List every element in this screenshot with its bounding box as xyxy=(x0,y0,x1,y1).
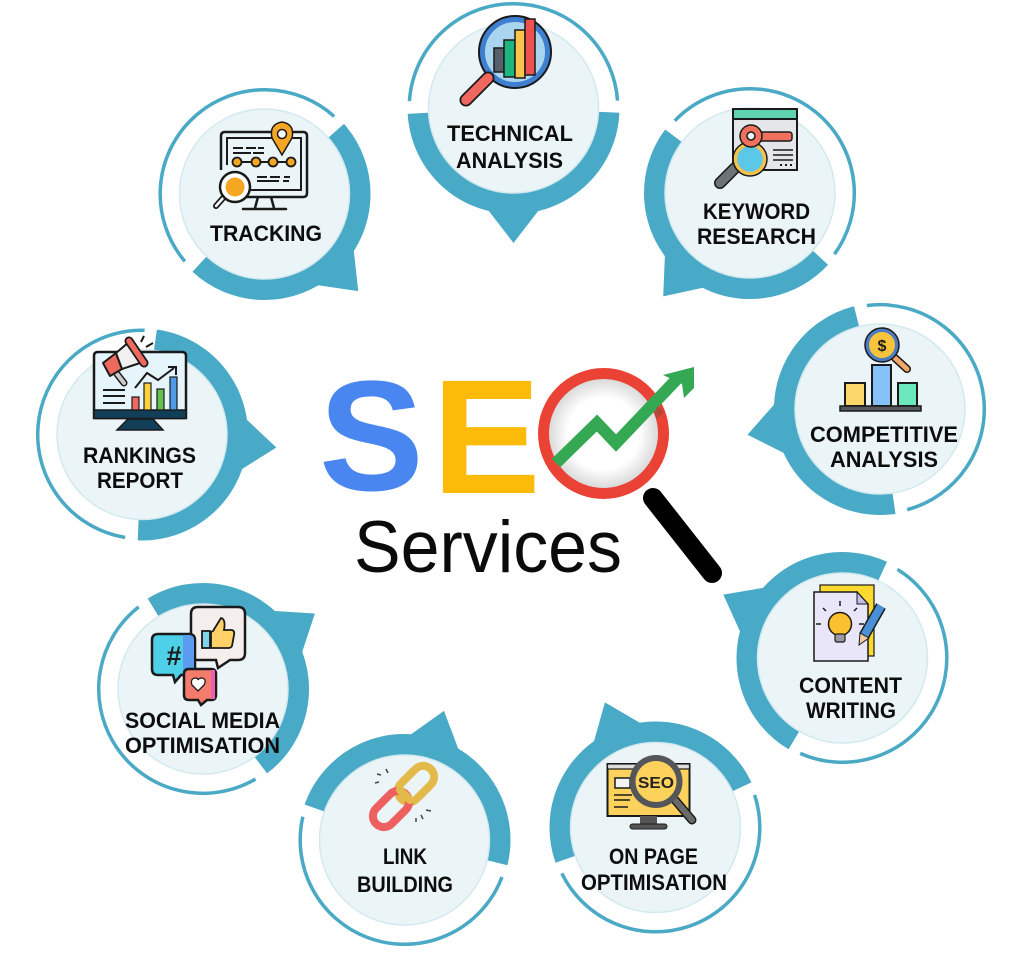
icon: monitor with SEO magnifier: SEO xyxy=(638,775,674,792)
label: rankings report: RANKINGS xyxy=(83,443,196,468)
label: social media optimisation: OPTIMISATION xyxy=(125,733,280,758)
label: content writing: WRITING xyxy=(806,698,896,723)
icon: monitor with location pin xyxy=(216,122,307,209)
label: on page optimisation: ON PAGE xyxy=(609,844,698,869)
panel: competitive analysis xyxy=(726,278,1011,544)
icon: social speech bubbles xyxy=(152,607,245,705)
icon: chain links xyxy=(368,761,439,832)
panel: keyword research xyxy=(578,36,907,368)
panel: social media optimisation xyxy=(48,521,377,844)
letter S: S xyxy=(319,349,424,524)
icon: monitor with SEO magnifier xyxy=(608,758,692,829)
letter E: E xyxy=(432,345,541,528)
badge ring: social media optimisation xyxy=(48,521,377,844)
icon: magnifier with bars xyxy=(466,16,551,100)
badge ring: link building xyxy=(265,678,550,975)
label: content writing: CONTENT xyxy=(799,673,902,698)
icon: monitor with megaphone and chart xyxy=(94,336,186,430)
label: keyword research: KEYWORD xyxy=(703,199,810,224)
icon: social speech bubbles: # xyxy=(166,641,182,671)
panel: technical analysis xyxy=(402,0,625,243)
label: content writing xyxy=(799,673,902,723)
label: competitive analysis xyxy=(810,422,958,472)
label: social media optimisation xyxy=(125,708,280,758)
icon: bars and dollar magnifier xyxy=(840,328,921,411)
label: competitive analysis: COMPETITIVE xyxy=(810,422,958,447)
badge ring: tracking xyxy=(107,37,438,368)
label: rankings report: REPORT xyxy=(97,468,183,493)
panel: rankings report xyxy=(21,313,287,558)
label: technical analysis: ANALYSIS xyxy=(456,148,563,173)
icon: document with bulb and pencil xyxy=(814,585,881,661)
label: link building: BUILDING xyxy=(357,872,453,897)
panel: tracking xyxy=(107,37,438,368)
badge ring: content writing xyxy=(671,496,993,809)
badge ring: keyword research xyxy=(578,36,907,368)
panel: content writing xyxy=(671,496,993,809)
central logo: SEO Services xyxy=(319,345,712,588)
badge ring: rankings report xyxy=(21,313,287,558)
label: technical analysis: TECHNICAL xyxy=(447,121,573,146)
label: social media optimisation: SOCIAL MEDIA xyxy=(125,708,280,733)
label: link building xyxy=(357,844,453,897)
label: on page optimisation xyxy=(581,844,727,895)
label: competitive analysis: ANALYSIS xyxy=(830,447,938,472)
panel: on page optimisation xyxy=(502,661,800,972)
icon: bars and dollar magnifier: $ xyxy=(878,338,887,355)
label: on page optimisation: OPTIMISATION xyxy=(581,870,727,895)
subtitle: Services: Services xyxy=(354,507,622,588)
badge ring: on page optimisation xyxy=(502,661,800,972)
label: keyword research xyxy=(697,199,816,249)
badge ring: technical analysis xyxy=(402,0,625,243)
label: rankings report xyxy=(83,443,196,493)
panel: link building xyxy=(265,678,550,975)
icon: key and magnifier xyxy=(720,109,797,183)
label: keyword research: RESEARCH xyxy=(697,224,816,249)
badge ring: competitive analysis xyxy=(726,278,1011,544)
label: link building: LINK xyxy=(383,844,428,869)
label: technical analysis xyxy=(447,121,573,173)
label: tracking: TRACKING xyxy=(210,221,322,246)
icon: magnifier O with growth arrow xyxy=(544,367,712,573)
